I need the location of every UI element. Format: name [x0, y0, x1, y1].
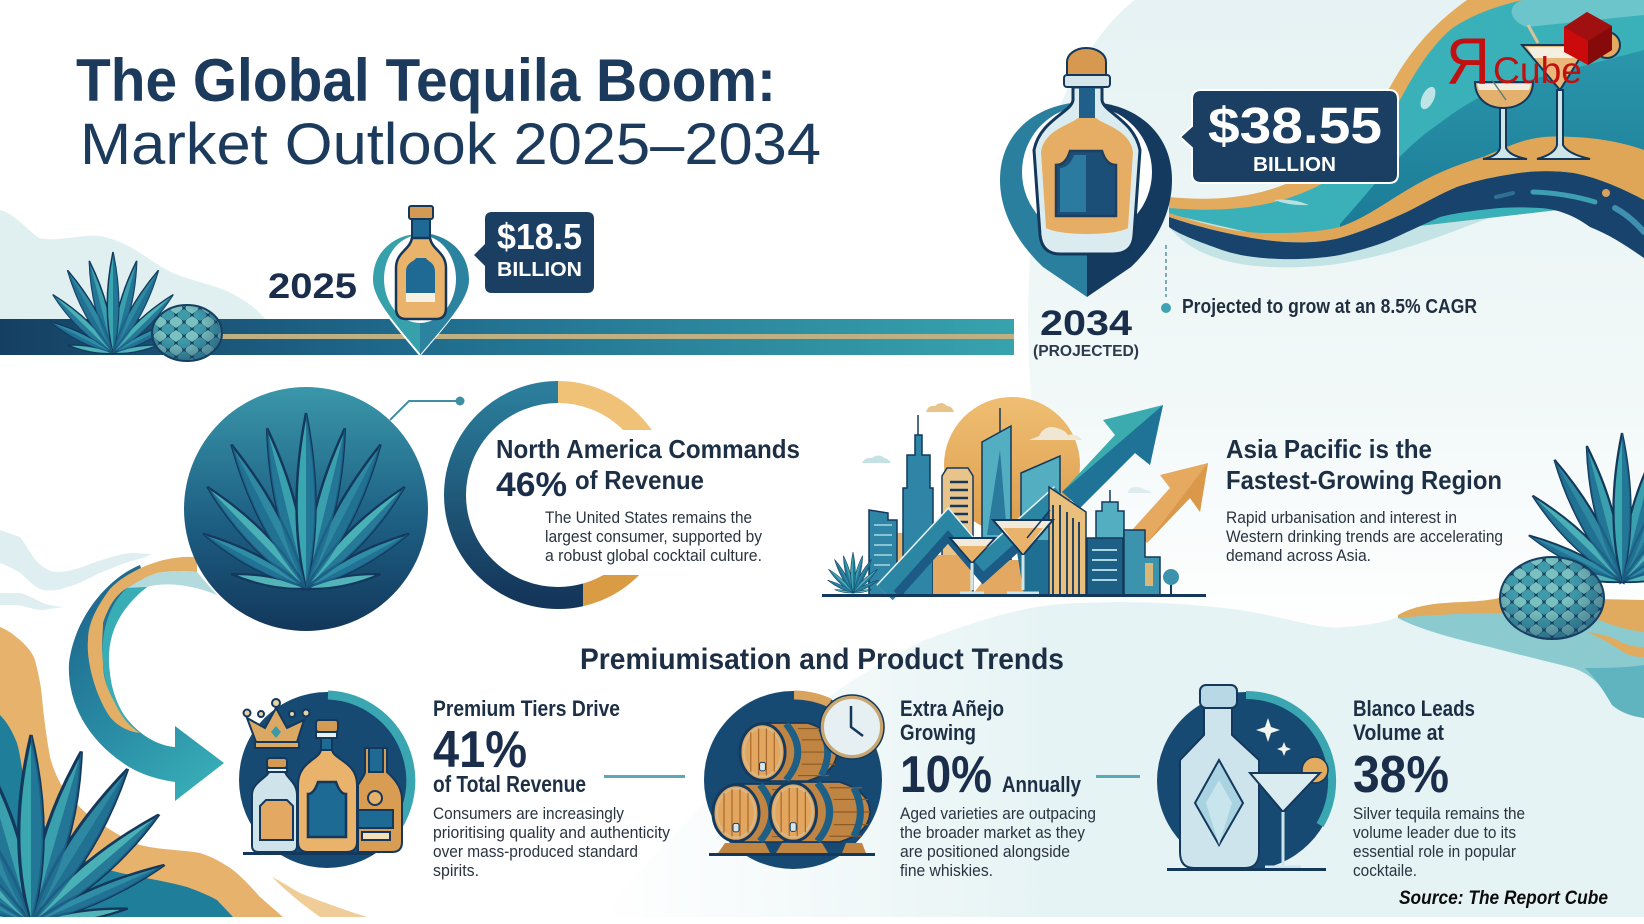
decoration: bottom left agave [0, 735, 164, 924]
icon: barrels and clock [704, 691, 884, 869]
callout: $38.55 billion: BILLION [1253, 154, 1336, 176]
icon: small location pin with bottle [372, 206, 469, 355]
text: Asia Pacific [1226, 434, 1503, 565]
timeline ribbon [0, 319, 1014, 355]
icon: left agave [50, 252, 176, 354]
text: extra anejo: Extra Añejo [900, 696, 1004, 721]
background: left pale waves [0, 530, 152, 610]
icon: blanco bottle and martini [1157, 685, 1335, 871]
title: Market Outlook 2025–2034 [80, 112, 821, 177]
top left pale hill [0, 210, 265, 319]
icon: left agave pina [152, 305, 222, 361]
text: blanco: 38% [1353, 746, 1449, 804]
text: extra anejo: are positioned alongside [900, 843, 1070, 861]
text: North America: largest consumer, supported by [545, 528, 763, 546]
callout: $38.55 billion: $38.55 [1208, 97, 1382, 154]
text: blanco [1353, 696, 1525, 880]
background: bottom left gold and teal shapes [0, 627, 367, 917]
text: North America [496, 434, 800, 565]
text: premium tiers: 41% [433, 721, 527, 779]
donut chart: 46 percent [455, 392, 661, 598]
heading: premiumisation: Premiumisation and Product Trends [580, 643, 1064, 676]
text: extra anejo: Annually [1002, 772, 1082, 797]
text: extra anejo: the broader market as they [900, 824, 1086, 842]
background: right teal and gold wave [1398, 597, 1644, 718]
text: extra anejo [900, 696, 1096, 880]
label: 2025: 2025 [268, 267, 357, 306]
text: Asia Pacific: Asia Pacific is the [1226, 434, 1432, 464]
text: blanco: Silver tequila remains the [1353, 805, 1525, 823]
label: 2034 projected: (PROJECTED) [1033, 343, 1139, 360]
CAGR note [1161, 245, 1477, 318]
text: blanco: Blanco Leads [1353, 696, 1475, 721]
text: premium tiers: over mass-produced standard [433, 843, 638, 861]
background: pale top right [1028, 0, 1644, 494]
icon: large location pin with bottle [1000, 48, 1172, 297]
text: Asia Pacific: demand across Asia. [1226, 547, 1371, 565]
text: extra anejo: Aged varieties are outpacing [900, 805, 1096, 823]
text: blanco: cocktaile. [1353, 862, 1417, 880]
text: Asia Pacific: Fastest-Growing Region [1226, 465, 1502, 495]
arrow: curved swoosh into premium tiers [69, 557, 224, 801]
text: extra anejo: Growing [900, 720, 976, 745]
callout: $38.55 billion [1180, 90, 1398, 183]
callout: $18.5 billion: BILLION [497, 259, 582, 281]
text: Asia Pacific: Western drinking trends are accelerating [1226, 528, 1503, 546]
text: North America: of Revenue [575, 465, 704, 495]
callout: $18.5 billion: $18.5 [497, 216, 582, 257]
icon: right agave [1529, 433, 1644, 582]
label: 2034 projected: 2034 [1040, 304, 1133, 343]
text: premium tiers: prioritising quality and authenticity [433, 824, 671, 842]
callout: $18.5 billion [474, 212, 594, 293]
logo: RCube [1448, 12, 1612, 84]
icon: agave circle [184, 387, 464, 631]
label: 2034 projected [1034, 310, 1138, 360]
text: North America: North America Commands [496, 434, 800, 464]
text: North America: a robust global cocktail culture. [545, 547, 762, 565]
source: Source: The Report Cube [1399, 888, 1608, 909]
text: blanco: essential role in popular [1353, 843, 1516, 861]
text: premium tiers: of Total Revenue [433, 771, 586, 797]
logo: RCube: Cube [1493, 50, 1582, 91]
title: The Global Tequila Boom: [76, 47, 776, 114]
text: premium tiers: Consumers are increasingly [433, 805, 625, 823]
text: extra anejo: 10% [900, 746, 992, 804]
text: North America: The United States remains the [545, 509, 752, 527]
logo: RCube: Я [1446, 24, 1490, 98]
text: premium tiers: spirits. [433, 862, 479, 880]
text: blanco: Volume at [1353, 720, 1445, 745]
text: premium tiers: Premium Tiers Drive [433, 696, 620, 721]
text: premium tiers [433, 696, 671, 880]
background: pale bottom wave [745, 602, 1644, 917]
icon: cocktail glasses [1475, 25, 1620, 159]
text: North America: 46% [496, 466, 567, 504]
text: blanco: volume leader due to its [1353, 824, 1516, 842]
illustration: city skyline with growth arrows [822, 397, 1208, 597]
text: Asia Pacific: Rapid urbanisation and interest in [1226, 509, 1457, 527]
icon: premium bottles [239, 692, 415, 868]
icon: right pina [1500, 557, 1604, 639]
text: extra anejo: fine whiskies. [900, 862, 993, 880]
top right wave [1169, 0, 1644, 267]
title [76, 57, 820, 164]
CAGR note: Projected to grow at an 8.5% CAGR [1182, 296, 1477, 318]
